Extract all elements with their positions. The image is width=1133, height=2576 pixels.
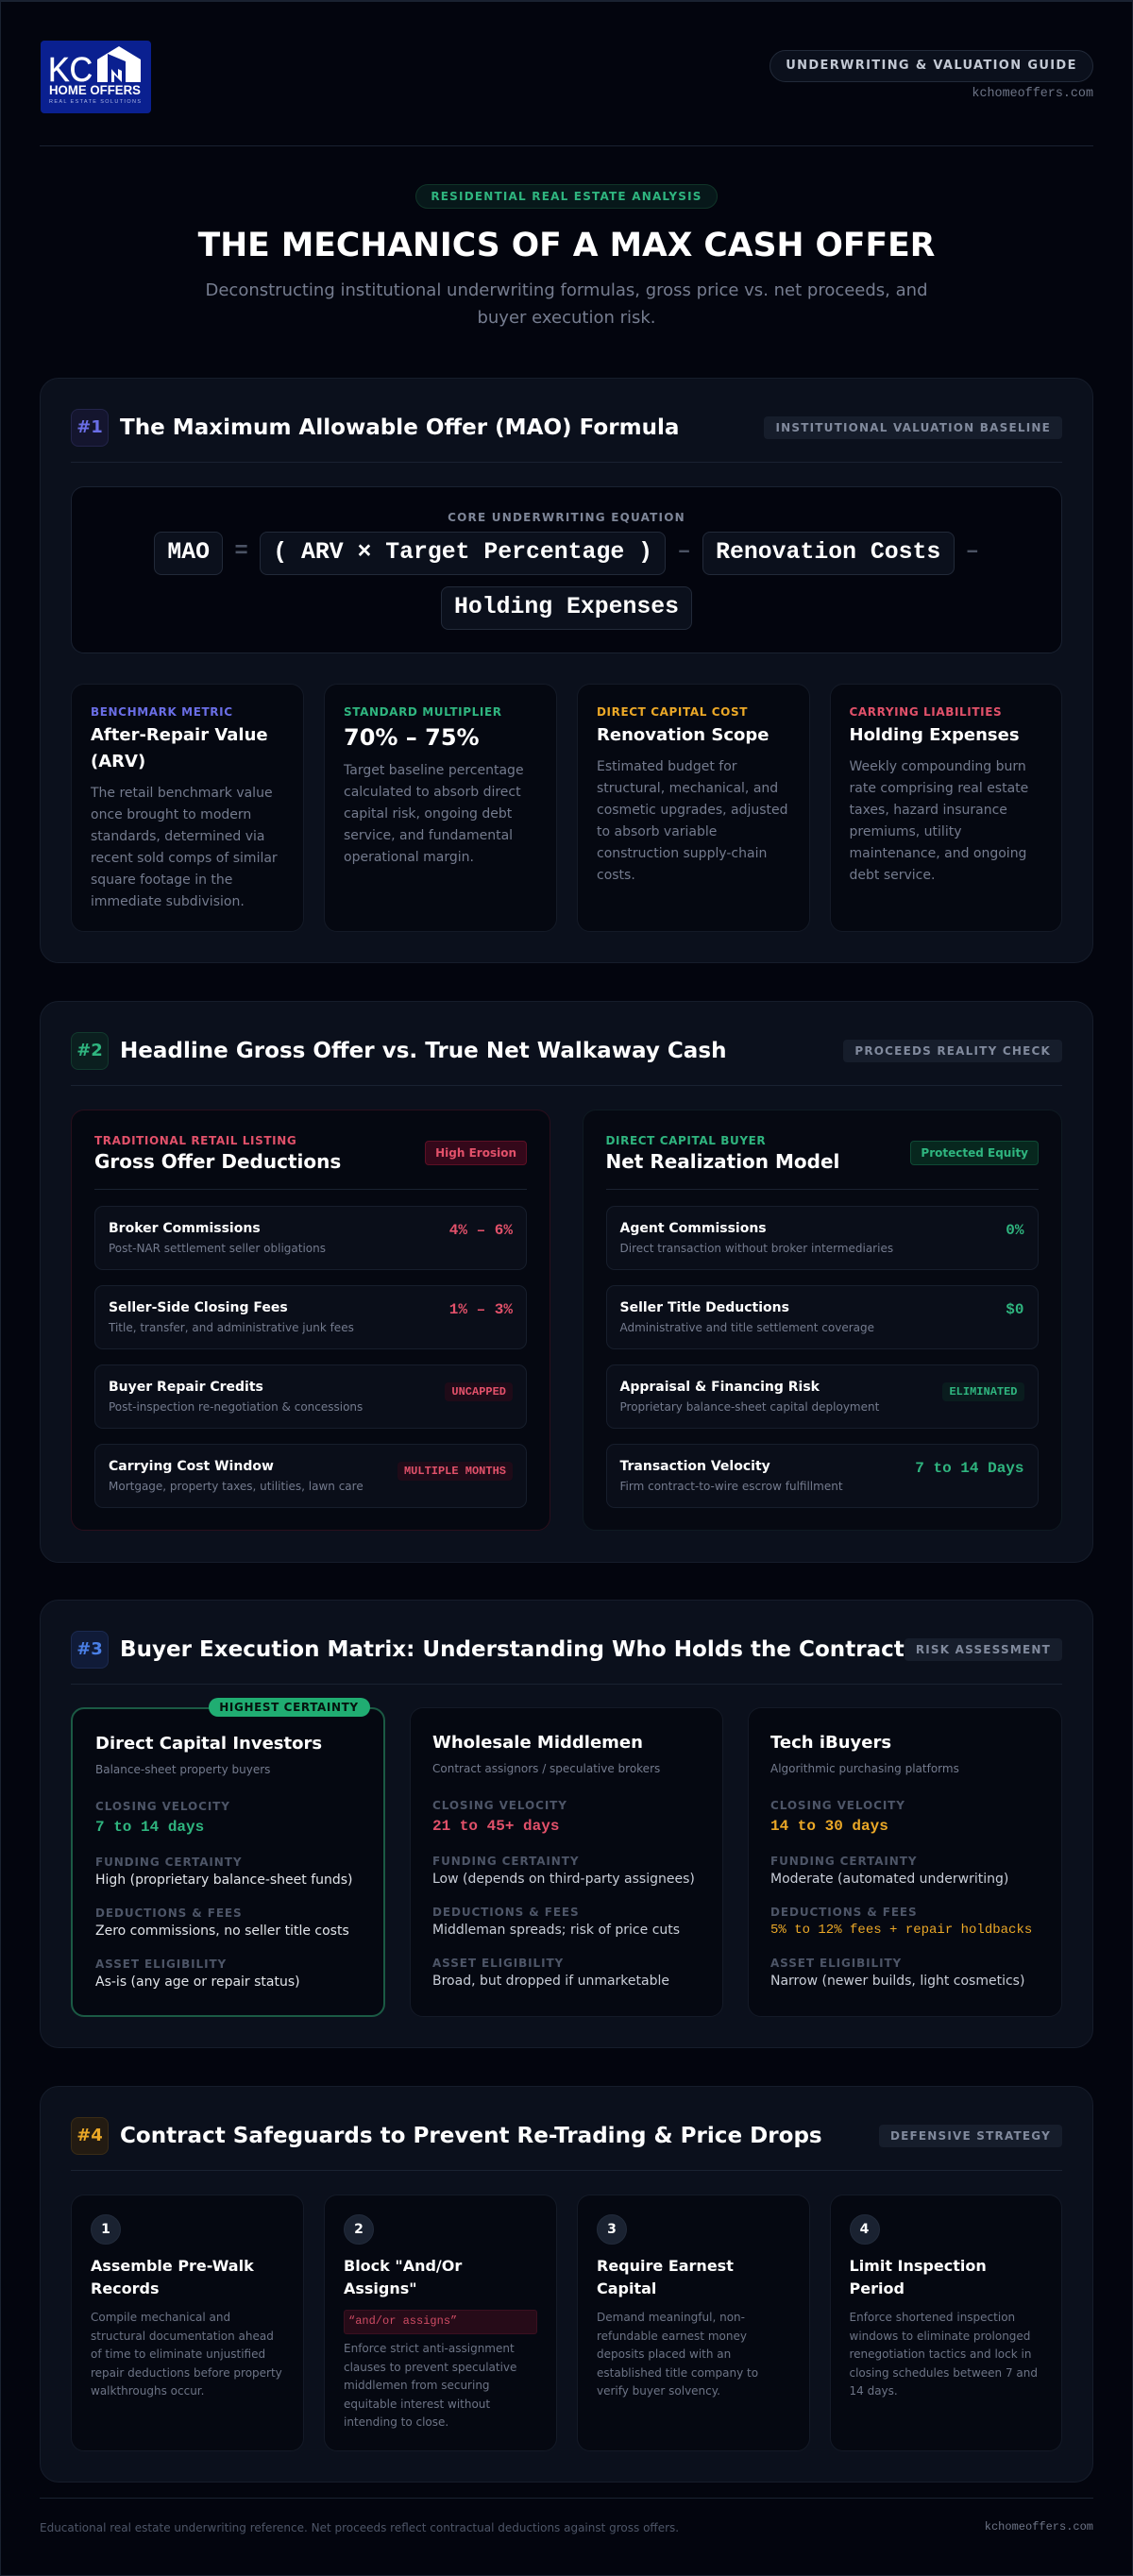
card: renovation xyxy=(577,684,810,932)
formula box: – xyxy=(966,539,979,565)
row: broker commissions xyxy=(94,1206,527,1270)
formula box: – xyxy=(677,539,691,565)
row: appraisal risk: Appraisal & Financing Risk xyxy=(619,1380,820,1395)
row: appraisal risk: ELIMINATED xyxy=(949,1385,1018,1398)
panel: safeguards xyxy=(40,2086,1093,2483)
row: carrying window: Carrying Cost Window xyxy=(109,1459,274,1474)
row: velocity xyxy=(606,1444,1039,1508)
card: ibuyers: DEDUCTIONS & FEES xyxy=(770,1906,918,1919)
logo: KC Home Offers: REAL ESTATE SOLUTIONS xyxy=(49,99,141,105)
row: carrying window: Mortgage, property taxes, utilities, lawn care xyxy=(109,1480,364,1493)
heading: section 3: Buyer Execution Matrix: Understanding Who Holds the Contract xyxy=(120,1637,905,1662)
column header: DIRECT CAPITAL BUYER xyxy=(606,1134,766,1147)
card: renovation: Estimated budget for structural, mechanical, and cosmetic upgrades, adjusted to absorb variable construction supply-chain costs. xyxy=(597,759,788,883)
guide pill: UNDERWRITING & VALUATION GUIDE xyxy=(786,59,1077,73)
row: agent commissions: 0% xyxy=(1006,1222,1023,1239)
heading: section 2: #2 xyxy=(76,1041,103,1060)
panel: gross vs net xyxy=(40,1001,1093,1563)
row: closing fees xyxy=(94,1285,527,1349)
card: direct investors xyxy=(71,1707,385,2017)
card: ibuyers: 5% to 12% fees + repair holdbacks xyxy=(770,1923,1032,1938)
card: holding: CARRYING LIABILITIES xyxy=(850,705,1002,719)
heading: section 3: RISK ASSESSMENT xyxy=(916,1643,1051,1656)
column header: Gross Offer Deductions xyxy=(94,1150,341,1173)
heading: section 3: #3 xyxy=(76,1639,103,1659)
card: multiplier: Target baseline percentage calculated to absorb direct capital risk, ongoing debt service, and fundamental operational margin. xyxy=(344,763,524,865)
card: step 2 xyxy=(324,2195,557,2451)
badge xyxy=(208,1698,370,1717)
card: direct investors: As-is (any age or repair status) xyxy=(95,1974,300,1990)
card: ibuyers xyxy=(748,1707,1062,2017)
card: wholesalers: Broad, but dropped if unmarketable xyxy=(432,1974,669,1989)
badge: HIGHEST CERTAINTY xyxy=(219,1701,359,1714)
card: ARV: BENCHMARK METRIC xyxy=(91,705,233,719)
card: ibuyers: Algorithmic purchasing platforms xyxy=(770,1762,959,1775)
formula box: MAO xyxy=(167,539,210,566)
formula box: Holding Expenses xyxy=(454,594,679,620)
row: broker commissions: 4% – 6% xyxy=(449,1222,513,1239)
footer note: Educational real estate underwriting reference. Net proceeds reflect contractual deductions against gross offers. xyxy=(40,2521,679,2534)
heading: section 4: #4 xyxy=(76,2126,103,2145)
heading: section 3 xyxy=(71,1631,1062,1685)
card: ibuyers: 14 to 30 days xyxy=(770,1818,888,1835)
card: step 3: Demand meaningful, non-refundable earnest money deposits placed with an established title company to verify buyer solvency. xyxy=(597,2311,758,2398)
heading: section 1: INSTITUTIONAL VALUATION BASELINE xyxy=(775,421,1051,434)
logo: KC Home Offers xyxy=(41,41,151,113)
logo: KC Home Offers: KC xyxy=(48,50,93,89)
column header xyxy=(94,1132,527,1190)
card: direct investors: FUNDING CERTAINTY xyxy=(95,1856,242,1869)
row: repair credits: Buyer Repair Credits xyxy=(109,1380,263,1395)
card: renovation: DIRECT CAPITAL COST xyxy=(597,705,748,719)
column header: Protected Equity xyxy=(921,1146,1028,1160)
site domain: kchomeoffers.com xyxy=(972,87,1093,101)
card: wholesalers: CLOSING VELOCITY xyxy=(432,1799,567,1812)
row: agent commissions: Direct transaction without broker intermediaries xyxy=(619,1242,893,1255)
row: velocity: Transaction Velocity xyxy=(619,1459,770,1474)
heading: section 2: Headline Gross Offer vs. True Net Walkaway Cash xyxy=(120,1039,727,1063)
card: step 2: Enforce strict anti-assignment clauses to prevent speculative middlemen from securing equitable interest without intending to close. xyxy=(344,2342,516,2429)
card: direct investors: High (proprietary balance-sheet funds) xyxy=(95,1873,353,1888)
card: step 2: Block "And/Or Assigns" xyxy=(344,2257,462,2297)
card: step 4: Enforce shortened inspection windows to eliminate prolonged renegotiation tactics and lock in closing schedules between 7 and 14 days. xyxy=(850,2311,1038,2398)
title: THE MECHANICS OF A MAX CASH OFFER xyxy=(198,227,935,264)
card: multiplier xyxy=(324,684,557,932)
logo: KC Home Offers: HOME OFFERS xyxy=(49,83,141,97)
card: step 1: Assemble Pre-Walk Records xyxy=(91,2257,254,2297)
heading: section 4: DEFENSIVE STRATEGY xyxy=(890,2128,1051,2142)
card: wholesalers: Wholesale Middlemen xyxy=(432,1733,643,1753)
row: repair credits xyxy=(94,1364,527,1429)
card: step 1 xyxy=(71,2195,304,2451)
formula box: CORE UNDERWRITING EQUATION xyxy=(448,511,685,524)
heading: section 1 xyxy=(71,409,1062,463)
card: wholesalers: 21 to 45+ days xyxy=(432,1818,559,1835)
card: multiplier: STANDARD MULTIPLIER xyxy=(344,705,502,719)
card: holding: Holding Expenses xyxy=(850,725,1020,745)
formula box: Renovation Costs xyxy=(716,539,940,566)
row: broker commissions: Broker Commissions xyxy=(109,1221,261,1236)
card: ARV: The retail benchmark value once brought to modern standards, determined via recent sold comps of similar square footage in the immediate subdivision. xyxy=(91,786,278,909)
card: step 4: 4 xyxy=(860,2222,869,2237)
footer domain: kchomeoffers.com xyxy=(985,2520,1093,2534)
row: title deductions: Seller Title Deductions xyxy=(619,1300,789,1315)
card: ARV xyxy=(71,684,304,932)
card: direct investors: Zero commissions, no seller title costs xyxy=(95,1924,349,1939)
card: step 3 xyxy=(577,2195,810,2451)
card: wholesalers: Middleman spreads; risk of price cuts xyxy=(432,1923,680,1938)
card: step 3: Require Earnest Capital xyxy=(597,2257,734,2297)
card: ibuyers: Narrow (newer builds, light cosmetics) xyxy=(770,1974,1024,1989)
card: step 1: Compile mechanical and structural documentation ahead of time to eliminate unjustified repair deductions before property walkthroughs occur. xyxy=(91,2311,282,2398)
heading: section 2 xyxy=(71,1032,1062,1086)
card: step 4 xyxy=(829,2195,1062,2451)
row: title deductions: $0 xyxy=(1006,1301,1023,1318)
row: repair credits: UNCAPPED xyxy=(451,1385,506,1398)
card: wholesalers xyxy=(410,1707,723,2017)
row: closing fees: Title, transfer, and administrative junk fees xyxy=(109,1321,354,1334)
eyebrow tag xyxy=(415,184,718,209)
column: gross deductions xyxy=(71,1110,550,1531)
card: wholesalers: ASSET ELIGIBILITY xyxy=(432,1957,564,1970)
row: appraisal risk: Proprietary balance-sheet capital deployment xyxy=(619,1400,879,1414)
panel: MAO formula xyxy=(40,378,1093,963)
card: step 1: 1 xyxy=(101,2222,110,2237)
card: step 3: 3 xyxy=(607,2222,617,2237)
card: direct investors: DEDUCTIONS & FEES xyxy=(95,1907,243,1920)
row: velocity: Firm contract-to-wire escrow fulfillment xyxy=(619,1480,843,1493)
card: wholesalers: Low (depends on third-party assignees) xyxy=(432,1872,695,1887)
card: direct investors: Balance-sheet property buyers xyxy=(95,1763,270,1776)
card: step 4: Limit Inspection Period xyxy=(850,2257,987,2297)
row: agent commissions: Agent Commissions xyxy=(619,1221,767,1236)
row: closing fees: 1% – 3% xyxy=(449,1301,513,1318)
card: ibuyers: Moderate (automated underwriting) xyxy=(770,1872,1008,1887)
row: repair credits: Post-inspection re-negotiation & concessions xyxy=(109,1400,363,1414)
formula box: = xyxy=(234,539,248,565)
card: holding: Weekly compounding burn rate comprising real estate taxes, hazard insurance premiums, utility maintenance, and ongoing debt service. xyxy=(850,759,1028,883)
formula box xyxy=(71,486,1062,653)
row: title deductions: Administrative and title settlement coverage xyxy=(619,1321,874,1334)
heading: section 4: Contract Safeguards to Prevent Re-Trading & Price Drops xyxy=(120,2123,822,2147)
card: multiplier: 70% – 75% xyxy=(344,724,480,751)
row: carrying window xyxy=(94,1444,527,1508)
card: wholesalers: FUNDING CERTAINTY xyxy=(432,1855,579,1868)
heading: section 4 xyxy=(71,2117,1062,2171)
card: ibuyers: FUNDING CERTAINTY xyxy=(770,1855,917,1868)
row: agent commissions xyxy=(606,1206,1039,1270)
column header: High Erosion xyxy=(435,1146,516,1160)
card: ibuyers: ASSET ELIGIBILITY xyxy=(770,1957,902,1970)
card: step 2: “and/or assigns” xyxy=(348,2314,457,2328)
row: appraisal risk xyxy=(606,1364,1039,1429)
row: title deductions xyxy=(606,1285,1039,1349)
subtitle xyxy=(205,280,927,328)
column header: TRADITIONAL RETAIL LISTING xyxy=(94,1134,296,1147)
heading: section 1: The Maximum Allowable Offer (MAO) Formula xyxy=(120,415,679,440)
column header: Net Realization Model xyxy=(606,1150,839,1173)
row: velocity: 7 to 14 Days xyxy=(915,1460,1023,1477)
row: broker commissions: Post-NAR settlement seller obligations xyxy=(109,1242,326,1255)
panel: buyer matrix xyxy=(40,1600,1093,2048)
row: carrying window: MULTIPLE MONTHS xyxy=(404,1465,506,1478)
heading: section 1: #1 xyxy=(76,417,103,437)
eyebrow tag: RESIDENTIAL REAL ESTATE ANALYSIS xyxy=(431,190,702,203)
card: wholesalers: Contract assignors / speculative brokers xyxy=(432,1762,660,1775)
subtitle: Deconstructing institutional underwriting formulas, gross price vs. net proceeds, and xyxy=(205,280,927,300)
guide pill xyxy=(769,50,1093,82)
subtitle: buyer execution risk. xyxy=(477,308,656,328)
card: holding xyxy=(829,684,1062,932)
card: renovation: Renovation Scope xyxy=(597,725,769,745)
card: wholesalers: DEDUCTIONS & FEES xyxy=(432,1906,580,1919)
heading: section 2: PROCEEDS REALITY CHECK xyxy=(854,1044,1051,1058)
card: step 2: 2 xyxy=(354,2222,364,2237)
card: ibuyers: CLOSING VELOCITY xyxy=(770,1799,905,1812)
card: ARV: After-Repair Value (ARV) xyxy=(91,725,268,771)
column header xyxy=(606,1132,1039,1190)
column: net realization xyxy=(582,1110,1062,1531)
card: direct investors: Direct Capital Investors xyxy=(95,1734,322,1754)
formula box: ( ARV × Target Percentage ) xyxy=(273,539,652,566)
card: direct investors: 7 to 14 days xyxy=(95,1819,204,1836)
card: direct investors: ASSET ELIGIBILITY xyxy=(95,1957,227,1971)
card: direct investors: CLOSING VELOCITY xyxy=(95,1800,230,1813)
row: closing fees: Seller-Side Closing Fees xyxy=(109,1300,288,1315)
card: ibuyers: Tech iBuyers xyxy=(770,1733,891,1753)
